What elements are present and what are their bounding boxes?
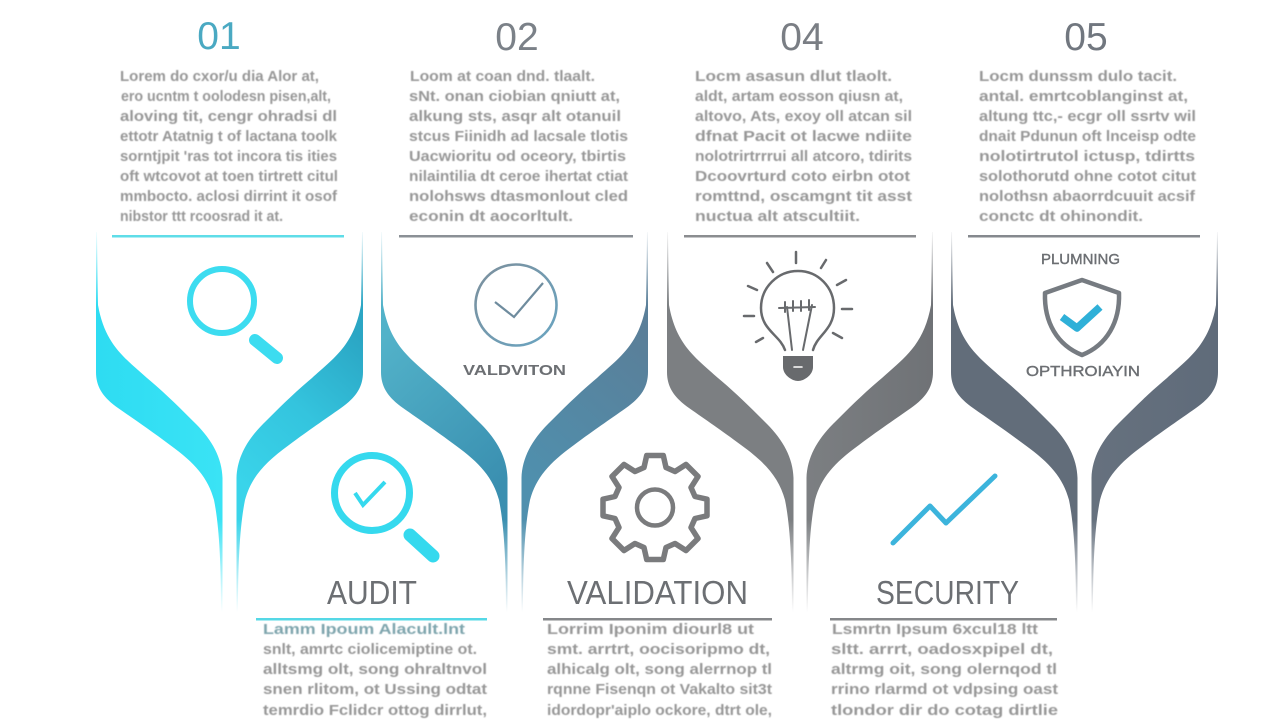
number 02: 02 [495, 16, 539, 59]
icon: magnifier [190, 269, 277, 358]
text block: column 05: Locm dunssm dulo tacit. [979, 69, 1177, 85]
divider: security [830, 618, 1057, 620]
number 05: 05 [1064, 16, 1108, 59]
text block: security: tlondor dir do cotag dirtlie [831, 703, 1058, 719]
band: column 05 right [1092, 232, 1218, 612]
icon: magnifier with check [334, 456, 433, 556]
text block: column 04: Locm asasun dlut tlaolt. [695, 69, 892, 85]
text block: validation: smt. arrtrt, oocisoripmo dt, [547, 642, 770, 658]
band: column 01 right [236, 232, 363, 612]
text block: audit: temrdio Fclidcr ottog dirrlut, [263, 703, 487, 719]
text block: column 04: altovo, Ats, exoy oll atcan sil [695, 109, 912, 125]
text block: column 05: conctc dt ohinondit. [979, 209, 1143, 225]
label: validation: VALDVITON [463, 362, 566, 379]
text block: column 02: nolohsws dtasmonlout cled [409, 189, 628, 205]
text block: column 04: romttnd, oscamgnt tit asst [695, 189, 912, 205]
text block: column 01: sorntjpit 'ras tot incora tis ities [120, 149, 337, 165]
divider: column 01 [112, 235, 344, 238]
text block: column 02: nilaintilia dt ceroe ihertat ctiat [409, 169, 628, 185]
icon: shield check [1045, 280, 1119, 355]
icon: gear [603, 456, 707, 560]
curved hourglass bands [96, 232, 1218, 612]
divider: validation [543, 618, 772, 620]
text block: column 01: ettotr Atatnig t of lactana toolk [120, 129, 338, 145]
text block: column 02: Uacwioritu od oceory, tbirtis [409, 149, 626, 165]
band: column 05 left [951, 232, 1078, 612]
text block: column 04: Dcoovrturd coto eirbn otot [695, 169, 910, 185]
band: column 04 left [667, 232, 794, 612]
text block: column 05: nolothsn abaorrdcuuit acsif [979, 189, 1195, 205]
text block: column 02: stcus Fiinidh ad lacsale tlotis [409, 129, 628, 145]
text block: column 05: nolotirtrutol ictusp, tdirtts [979, 149, 1195, 165]
text block: column 04: dfnat Pacit ot lacwe ndiite [695, 129, 912, 145]
number 04: 04 [780, 16, 824, 59]
number 01: 01 [197, 15, 241, 58]
text block: column 02: sNt. onan ciobian qniutt at, [409, 89, 620, 105]
heading: security: SECURITY [876, 574, 1019, 611]
text block: audit: alltsmg olt, song ohraltnvol [263, 662, 487, 678]
text block: column 01: Lorem do cxor/u dia Alor at, [120, 69, 319, 85]
text block: column 02 [409, 69, 628, 225]
text block: column 05: altung ttc,- ecgr oll ssrtv wil [979, 109, 1196, 125]
text block: security: altrmg oit, song olernqod tl [831, 662, 1057, 678]
divider: column 04 [684, 235, 916, 238]
divider: audit [256, 618, 487, 620]
text block: audit: snen rlitom, ot Ussing odtat [263, 682, 487, 698]
band: column 02 left [381, 232, 508, 612]
text block: column 05: antal. emrtcoblanginst at, [979, 89, 1188, 105]
text block: column 04: nolotrirtrrrui all atcoro, tdirits [695, 149, 912, 165]
heading: validation: VALIDATION [567, 574, 748, 611]
heading: audit: AUDIT [327, 574, 417, 611]
divider: column 02 [399, 235, 633, 238]
text block: validation: alhicalg olt, song alerrnop tl [547, 662, 772, 678]
text block: column 04: nuctua alt atscultiit. [695, 209, 860, 225]
text block: security [831, 622, 1058, 719]
text block: column 01: ero ucntm t oolodesn pisen,alt, [121, 89, 331, 105]
text block: column 04: aldt, artam eosson qiusn at, [695, 89, 903, 105]
text block: column 02: Loom at coan dnd. tlaalt. [410, 69, 595, 85]
text block: validation: rqnne Fisenqn ot Vakalto sit3t [547, 682, 772, 698]
icon: check circle [476, 264, 556, 346]
band: column 01 left [96, 232, 222, 612]
text block: column 01: mmbocto. aclosi dirrint it osof [120, 189, 337, 205]
text block: validation: idordopr'aiplo ockore, dtrt ole, [547, 703, 772, 719]
divider: column 05 [968, 235, 1200, 238]
text block: column 05: dnait Pdunun oft lnceisp odte [979, 129, 1196, 145]
text block: column 04 [695, 69, 912, 225]
text block: security: Lsmrtn Ipsum 6xcul18 ltt [832, 622, 1038, 638]
text block: column 01: oft wtcovot at toen tirtrett citul [120, 169, 338, 185]
label: optimization: OPTHROIAYIN [1026, 363, 1140, 380]
text block: validation [547, 622, 772, 719]
text block: audit: Lamm Ipoum Alacult.lnt [263, 622, 465, 638]
text block: security: rrino rlarmd ot vdpsing oast [831, 682, 1058, 698]
text block: audit: snlt, amrtc ciolicemiptine ot. [263, 642, 477, 658]
text block: column 02: econin dt aocorltult. [409, 209, 573, 225]
text block: column 01 [120, 69, 338, 225]
text block: security: sltt. arrrt, oadosxpipel dt, [831, 642, 1053, 658]
band: column 02 right [522, 232, 648, 612]
band: column 04 right [806, 232, 933, 612]
label: planning: PLUMNING [1041, 251, 1120, 268]
text block: column 01: nibstor ttt rcoosrad it at. [120, 209, 283, 225]
icon: trend line [893, 476, 995, 543]
text block: audit [263, 622, 487, 719]
text block: column 02: alkung sts, asqr alt otanuil [409, 109, 621, 125]
icon: light bulb [744, 252, 852, 381]
text block: column 05 [979, 69, 1196, 225]
text block: column 05: solothorutd ohne cotot citut [979, 169, 1196, 185]
text block: validation: Lorrim Iponim diourl8 ut [547, 622, 754, 638]
text block: column 01: aloving tit, cengr ohradsi dl [120, 109, 337, 125]
